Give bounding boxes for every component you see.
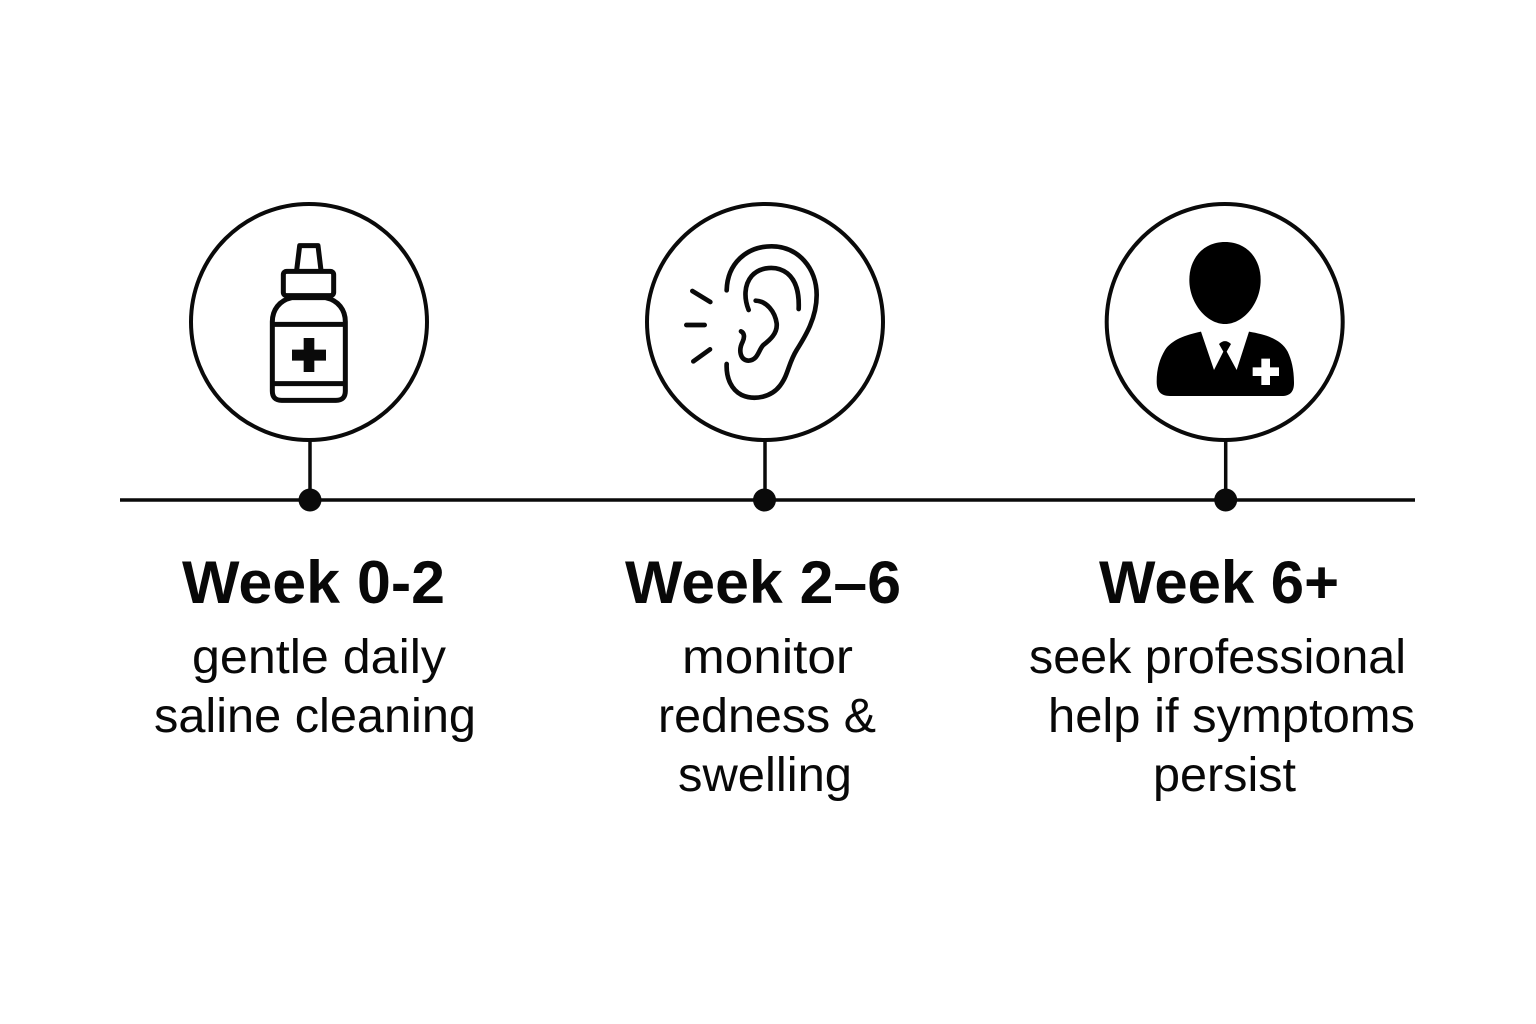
timeline axis xyxy=(120,498,1415,502)
icon: medical professional xyxy=(1157,242,1294,396)
connector and dot: week 6+ xyxy=(1214,440,1237,512)
icon circle: week 6+ xyxy=(1107,204,1343,440)
description: week 6+: help if symptoms xyxy=(1048,690,1415,743)
heading: week 0-2: Week 0-2 xyxy=(182,549,445,616)
icon circle: week 2-6 xyxy=(647,204,883,440)
milestone: week 6+ xyxy=(1029,204,1415,802)
description: week 2-6 xyxy=(658,631,876,802)
heading: week 2-6: Week 2–6 xyxy=(625,549,901,616)
description: week 2-6: swelling xyxy=(678,749,852,802)
connector and dot: week 2-6 xyxy=(753,440,776,512)
description: week 6+: seek professional xyxy=(1029,631,1406,684)
icon circle: week 0-2 xyxy=(191,204,427,440)
milestone: week 2-6 xyxy=(625,204,901,802)
description: week 6+: persist xyxy=(1153,749,1296,802)
connector and dot: week 0-2 xyxy=(298,440,322,512)
icon: saline dropper bottle xyxy=(272,246,345,400)
icon: ear with sound lines xyxy=(686,246,817,398)
description: week 0-2 xyxy=(154,631,476,743)
description: week 0-2: saline cleaning xyxy=(154,690,476,743)
milestone: week 0-2 xyxy=(154,204,476,743)
description: week 2-6: monitor xyxy=(682,631,853,684)
description: week 2-6: redness & xyxy=(658,690,876,743)
description: week 0-2: gentle daily xyxy=(192,631,446,684)
heading: week 6+: Week 6+ xyxy=(1099,549,1339,616)
description: week 6+ xyxy=(1029,631,1415,802)
